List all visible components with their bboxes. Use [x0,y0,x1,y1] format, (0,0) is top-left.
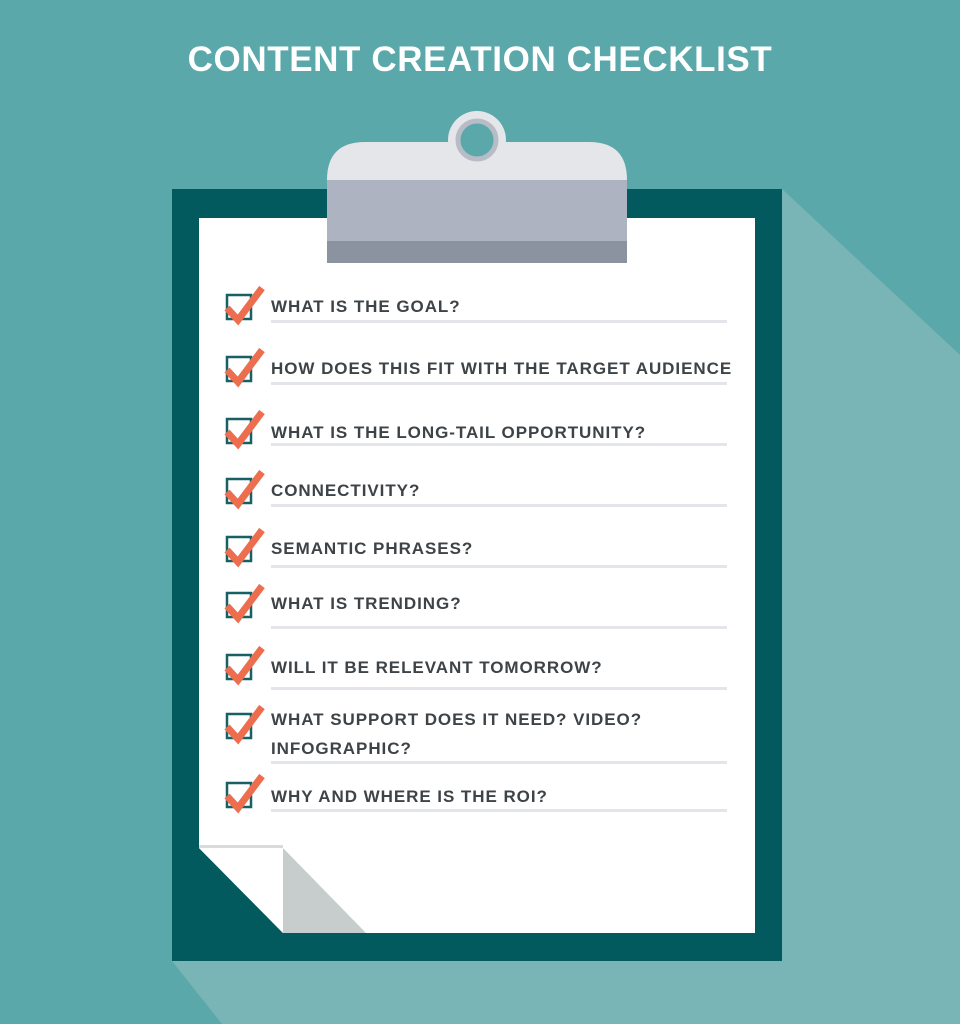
paper [199,218,755,933]
item 8 [224,705,727,764]
item 1: WHAT IS THE GOAL? [271,297,461,316]
item 5 [224,528,727,568]
item 8: INFOGRAPHIC? [271,739,412,758]
item 2 [224,348,732,388]
item 3 [224,410,727,450]
item 4: CONNECTIVITY? [271,481,420,500]
item 9: WHY AND WHERE IS THE ROI? [271,787,548,806]
item 5: SEMANTIC PHRASES? [271,539,473,558]
clip [327,111,627,263]
item 3: WHAT IS THE LONG-TAIL OPPORTUNITY? [271,423,646,442]
title: CONTENT CREATION CHECKLIST [188,40,772,79]
item 7: WILL IT BE RELEVANT TOMORROW? [271,658,603,677]
item 4 [224,470,727,510]
item 6 [224,584,727,629]
item 7 [224,646,727,690]
clipboard [172,189,782,961]
item 9 [224,774,727,814]
item 8: WHAT SUPPORT DOES IT NEED? VIDEO? [271,710,642,729]
checklist items [224,286,732,814]
item 1 [224,286,727,326]
item 6: WHAT IS TRENDING? [271,594,462,613]
item 2: HOW DOES THIS FIT WITH THE TARGET AUDIENCE [271,359,732,378]
